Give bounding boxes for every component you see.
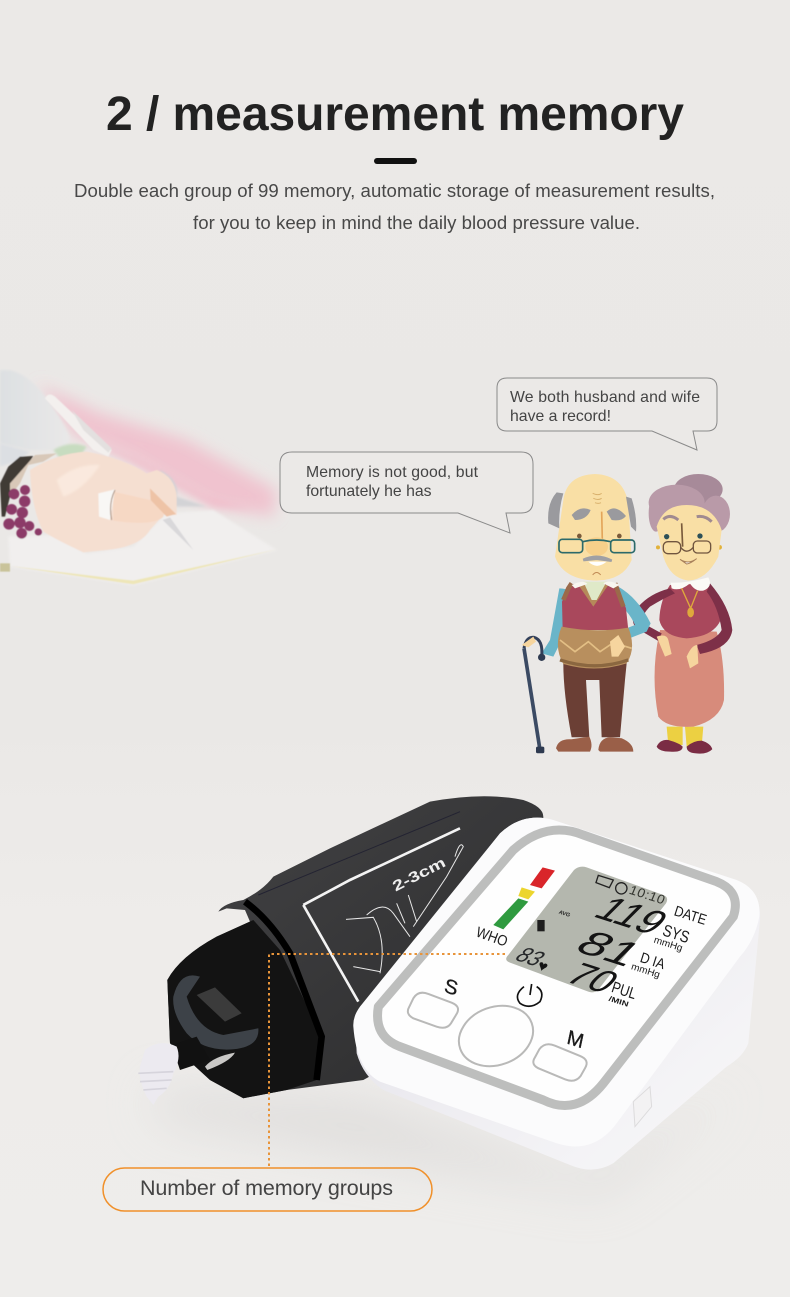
speech bubble: husband and wife xyxy=(497,378,717,450)
subtitle text: for you to keep in mind the daily blood pressure value. xyxy=(193,212,640,233)
cuff label: 2-3cm xyxy=(390,855,449,895)
LCD screen: 10:10 xyxy=(627,883,667,907)
photo: blood pressure monitor body xyxy=(353,818,760,1170)
device labels: D IA xyxy=(638,950,667,973)
device labels: S xyxy=(442,975,460,1001)
photo: blood pressure monitor shadow xyxy=(150,1090,740,1195)
device labels xyxy=(442,903,709,1053)
speech bubble: husband and wife: We both husband and wife xyxy=(510,389,700,406)
cane xyxy=(522,637,545,753)
title: 2 / measurement memory xyxy=(106,88,684,141)
subtitle text xyxy=(74,180,715,233)
LCD screen: 119 xyxy=(585,890,678,942)
LCD screen: ♥ xyxy=(535,958,550,976)
speech bubble: husband and wife: have a record! xyxy=(510,408,611,425)
buttons xyxy=(408,993,587,1081)
LCD screen: 70 xyxy=(557,957,627,1000)
woman xyxy=(633,474,732,754)
man xyxy=(542,474,651,752)
title accent bar xyxy=(374,158,417,164)
WHO colour scale xyxy=(474,867,555,950)
LCD screen: 83 xyxy=(509,944,551,971)
device labels: PUL xyxy=(609,979,639,1003)
photo: hand writing with a pen xyxy=(0,370,277,585)
device labels: mmHg xyxy=(652,935,684,954)
callout label xyxy=(103,1168,432,1211)
illustration: elderly couple xyxy=(522,474,732,754)
device labels: /MIN xyxy=(608,994,630,1009)
device labels: mmHg xyxy=(630,961,661,981)
callout leader line xyxy=(269,954,505,1168)
speech bubble: memory is not good: fortunately he has xyxy=(306,483,432,500)
callout label: Number of memory groups xyxy=(140,1176,393,1200)
photo: rolled arm cuff xyxy=(138,796,543,1105)
WHO colour scale: WHO xyxy=(474,923,510,950)
LCD screen: AVG xyxy=(557,910,571,919)
device labels: M xyxy=(565,1027,586,1053)
LCD screen: 81 xyxy=(566,924,652,973)
speech bubble: memory is not good: Memory is not good, but xyxy=(306,464,479,481)
LCD screen xyxy=(506,867,678,1000)
power icon xyxy=(517,984,542,1006)
side port xyxy=(633,1087,652,1127)
device labels: SYS xyxy=(660,921,692,947)
device labels: DATE xyxy=(672,903,709,929)
speech bubble: memory is not good xyxy=(280,452,533,533)
subtitle text: Double each group of 99 memory, automatic storage of measurement results, xyxy=(74,180,715,201)
